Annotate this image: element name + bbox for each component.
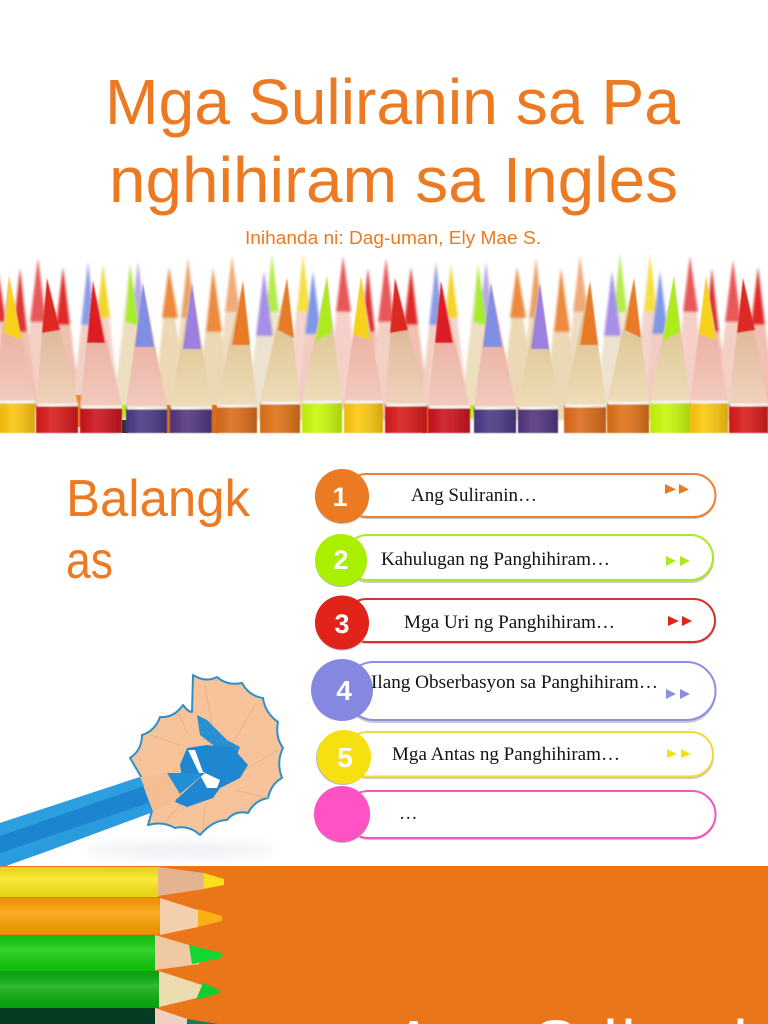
darker green pencil: [0, 971, 220, 1008]
image: stacked colored pencils: [0, 867, 224, 1024]
wood shaving: [130, 675, 283, 835]
list item 5: Mga Antas ng Panghihiram…: [392, 745, 620, 765]
1: [0, 276, 35, 402]
heading: Balangkas: [66, 470, 251, 590]
body shading: [0, 403, 768, 433]
list item 2: [315, 534, 714, 587]
7: [260, 278, 300, 403]
list item 4: [311, 659, 716, 723]
blue core of the shaving: [175, 745, 248, 807]
dark green pencil: [0, 1008, 218, 1024]
list item 5: [316, 730, 714, 785]
pencil shading: [0, 867, 160, 1008]
pencil shadow: [85, 842, 275, 858]
list item 4: Ilang Obserbasyon sa Panghihiram…: [371, 673, 658, 693]
subtitle: Inihanda ni: Dag-uman, Ely Mae S.: [245, 228, 541, 248]
11: [428, 281, 470, 407]
6: [216, 281, 257, 405]
heading: Balangkas: Balangk: [66, 470, 251, 528]
13: [518, 283, 558, 407]
white edges where paint meets wood: [0, 402, 768, 408]
15: [607, 278, 649, 403]
list item 1: 1: [332, 482, 348, 512]
title: [105, 66, 680, 216]
8: [302, 276, 342, 402]
list item 3: Mga Uri ng Panghihiram…: [404, 613, 615, 633]
blue streaks: [197, 715, 240, 755]
list item 2: 2: [333, 545, 349, 575]
title: Mga Suliranin sa Pa: [105, 66, 680, 138]
12: [474, 283, 516, 407]
3: [80, 281, 122, 407]
17: [690, 276, 728, 402]
4: [126, 283, 167, 407]
white glints: [188, 750, 220, 788]
list item 6: [314, 786, 716, 843]
16: [650, 276, 690, 402]
yellow pencil: [0, 867, 224, 897]
list item 3: [315, 596, 716, 650]
stubs of back pencil bodies: [76, 395, 476, 433]
image: row of colored pencils: [0, 254, 768, 433]
pencil body: [0, 777, 153, 868]
blurred back row of pencils: [0, 254, 768, 420]
pencil wood cone: [140, 773, 205, 812]
sharp front row of pencils: [0, 276, 768, 433]
title: nghihiram sa Ingles: [109, 144, 678, 216]
list item 2: Kahulugan ng Panghihiram…: [381, 550, 610, 570]
14: [564, 281, 606, 405]
list item 1: Ang Suliranin…: [411, 486, 537, 506]
green pencil: [0, 935, 222, 971]
list item 4: 4: [336, 675, 352, 706]
image: blue pencil with shaving: [0, 675, 283, 868]
list item 1: [315, 469, 716, 524]
18: [729, 278, 768, 404]
heading: Balangkas: as: [66, 532, 113, 590]
2: [36, 278, 78, 404]
list item 6: …: [399, 804, 418, 824]
orange band: [0, 866, 768, 1024]
list item 5: 5: [337, 742, 353, 773]
9: [344, 276, 383, 402]
5: [170, 283, 212, 407]
pencil facets: [0, 777, 144, 836]
pencil lead: [167, 773, 205, 794]
list item 3: 3: [334, 609, 350, 639]
shaving folds: [150, 685, 278, 828]
orange pencil: [0, 898, 222, 935]
10: [385, 278, 427, 404]
